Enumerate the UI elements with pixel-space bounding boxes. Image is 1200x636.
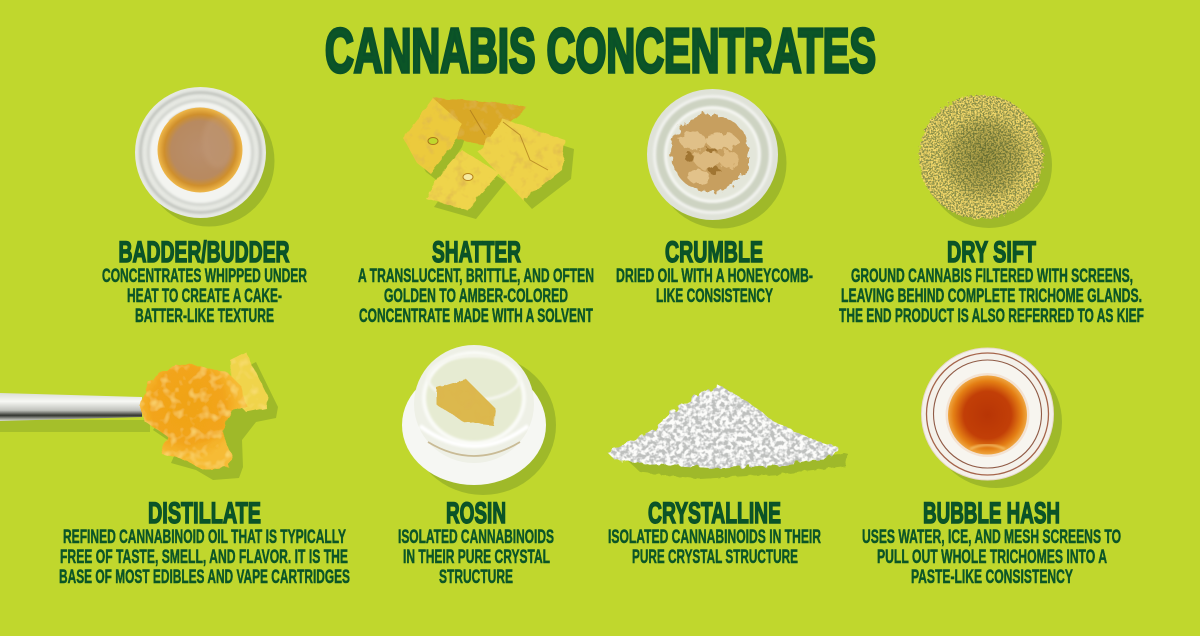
- title: CANNABIS CONCENTRATES: [325, 17, 876, 86]
- text: badder description: HEAT TO CREATE A CAKE-: [127, 285, 282, 307]
- panel: distillate: [0, 352, 350, 588]
- text: bubble hash description: [862, 526, 1121, 588]
- text: rosin description: [398, 526, 554, 588]
- image: badder jar: [135, 87, 274, 226]
- text: badder description: CONCENTRATES WHIPPED UNDER: [102, 265, 307, 287]
- text: distillate description: FREE OF TASTE, SMELL, AND FLAVOR. IT IS THE: [60, 546, 348, 568]
- panel: crumble: [616, 89, 813, 307]
- text: crumble description: [616, 265, 813, 307]
- text: crystalline description: PURE CRYSTAL STRUCTURE: [632, 546, 798, 568]
- text: shatter description: GOLDEN TO AMBER-COLORED: [384, 285, 568, 307]
- text: shatter description: A TRANSLUCENT, BRITTLE, AND OFTEN: [358, 265, 594, 287]
- image: rosin jar: [402, 345, 556, 495]
- image: distillate on tool: [0, 352, 278, 480]
- image: crumble jar: [647, 89, 786, 228]
- text: crumble description: DRIED OIL WITH A HONEYCOMB-: [616, 265, 813, 287]
- text: shatter description: [358, 265, 594, 327]
- heading: dry sift: DRY SIFT: [947, 236, 1036, 269]
- text: bubble hash description: PASTE-LIKE CONSISTENCY: [911, 566, 1073, 588]
- image: bubble hash jar: [922, 348, 1062, 488]
- image: crystal pile: [607, 385, 848, 479]
- heading: bubble hash: BUBBLE HASH: [923, 497, 1060, 530]
- heading: rosin: ROSIN: [446, 497, 506, 530]
- text: shatter description: CONCENTRATE MADE WITH A SOLVENT: [359, 305, 593, 327]
- panel: rosin: [398, 345, 556, 588]
- text: badder description: BATTER-LIKE TEXTURE: [135, 305, 274, 327]
- panel: dry sift: [839, 95, 1144, 327]
- heading: crumble: CRUMBLE: [665, 236, 763, 269]
- panel: badder/budder: [102, 87, 307, 327]
- panel: crystalline: [607, 385, 848, 568]
- text: crystalline description: ISOLATED CANNABINOIDS IN THEIR: [608, 526, 821, 548]
- text: dry sift description: [839, 265, 1144, 327]
- text: rosin description: STRUCTURE: [439, 566, 513, 588]
- text: distillate description: BASE OF MOST EDIBLES AND VAPE CARTRIDGES: [59, 566, 350, 588]
- heading: crystalline: CRYSTALLINE: [648, 497, 781, 530]
- text: distillate description: REFINED CANNABINOID OIL THAT IS TYPICALLY: [63, 526, 346, 548]
- text: badder description: [102, 265, 307, 327]
- heading: badder/budder: BADDER/BUDDER: [118, 236, 290, 269]
- panel: shatter: [358, 98, 594, 327]
- panel: bubble hash: [862, 348, 1121, 588]
- image: dry sift ball: [919, 95, 1052, 228]
- text: crystalline description: [608, 526, 821, 568]
- text: rosin description: ISOLATED CANNABINOIDS: [398, 526, 554, 548]
- text: crumble description: LIKE CONSISTENCY: [656, 285, 773, 307]
- heading: distillate: DISTILLATE: [148, 497, 261, 530]
- heading: shatter: SHATTER: [432, 236, 521, 269]
- image: shatter shards: [403, 98, 574, 219]
- text: rosin description: IN THEIR PURE CRYSTAL: [403, 546, 550, 568]
- text: distillate description: [59, 526, 350, 588]
